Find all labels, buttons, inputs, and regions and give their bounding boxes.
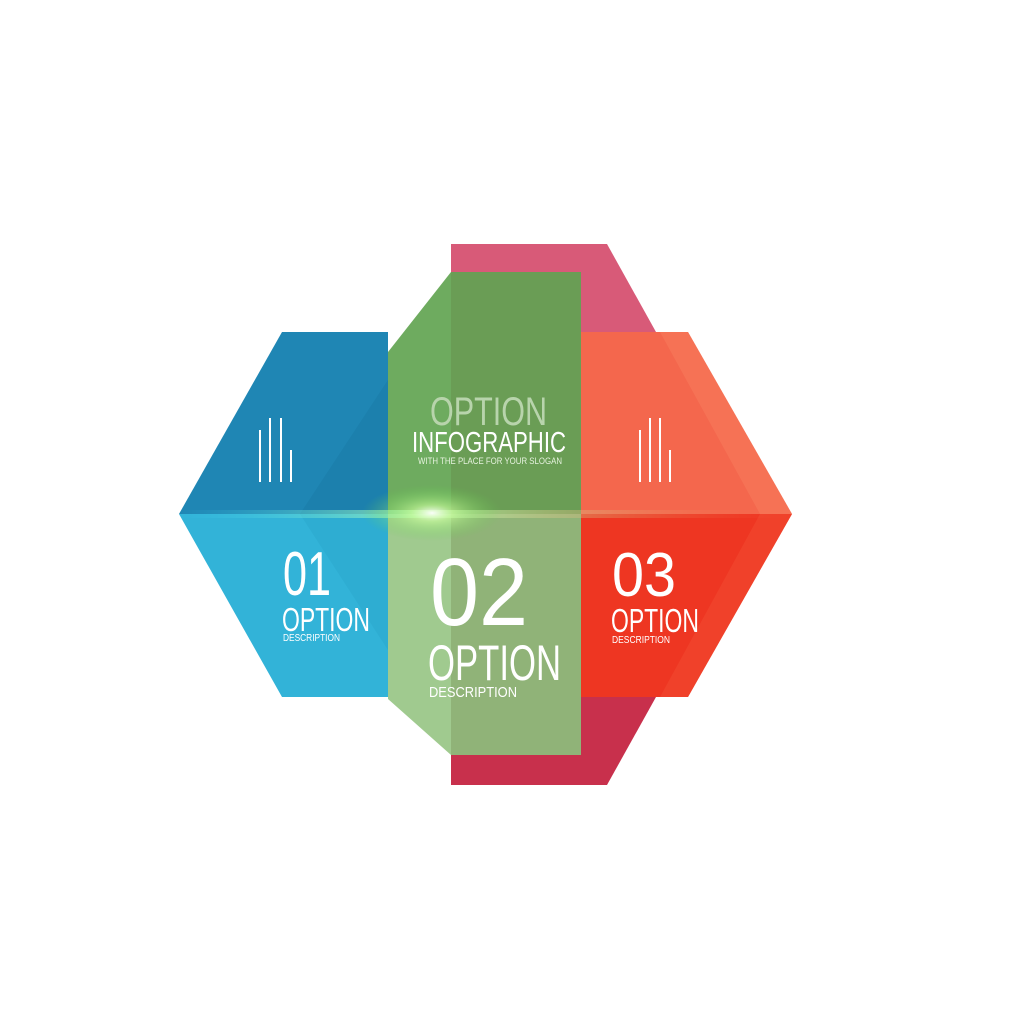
text: 01 option: 01 bbox=[283, 540, 331, 609]
shape: back crimson panel bbox=[451, 244, 656, 785]
text: title: INFOGRAPHIC bbox=[412, 427, 566, 459]
text: 03 option bbox=[611, 541, 699, 646]
text: 02 option bbox=[428, 539, 561, 701]
glow: center light bbox=[179, 485, 792, 541]
panel: green center option 02 bbox=[388, 272, 581, 755]
text: 02 option: DESCRIPTION bbox=[429, 684, 517, 701]
text: 01 option: OPTION bbox=[282, 601, 370, 638]
text: title: OPTION bbox=[430, 390, 547, 434]
text: 01 option: DESCRIPTION bbox=[283, 633, 340, 644]
text: title: WITH THE PLACE FOR YOUR SLOGAN bbox=[418, 456, 562, 466]
text: 03 option: DESCRIPTION bbox=[612, 635, 670, 646]
text: 02 option: OPTION bbox=[428, 635, 561, 691]
icon: bars bbox=[260, 418, 291, 482]
text: 03 option: OPTION bbox=[611, 602, 699, 639]
text: 03 option: 03 bbox=[612, 541, 676, 610]
text: 01 option bbox=[282, 540, 370, 644]
panel: orange option 03 bbox=[581, 332, 792, 697]
text: 02 option: 02 bbox=[430, 539, 528, 646]
panel: blue option 01 bbox=[179, 332, 388, 697]
text: title bbox=[412, 390, 566, 466]
icon: bars bbox=[640, 418, 670, 482]
